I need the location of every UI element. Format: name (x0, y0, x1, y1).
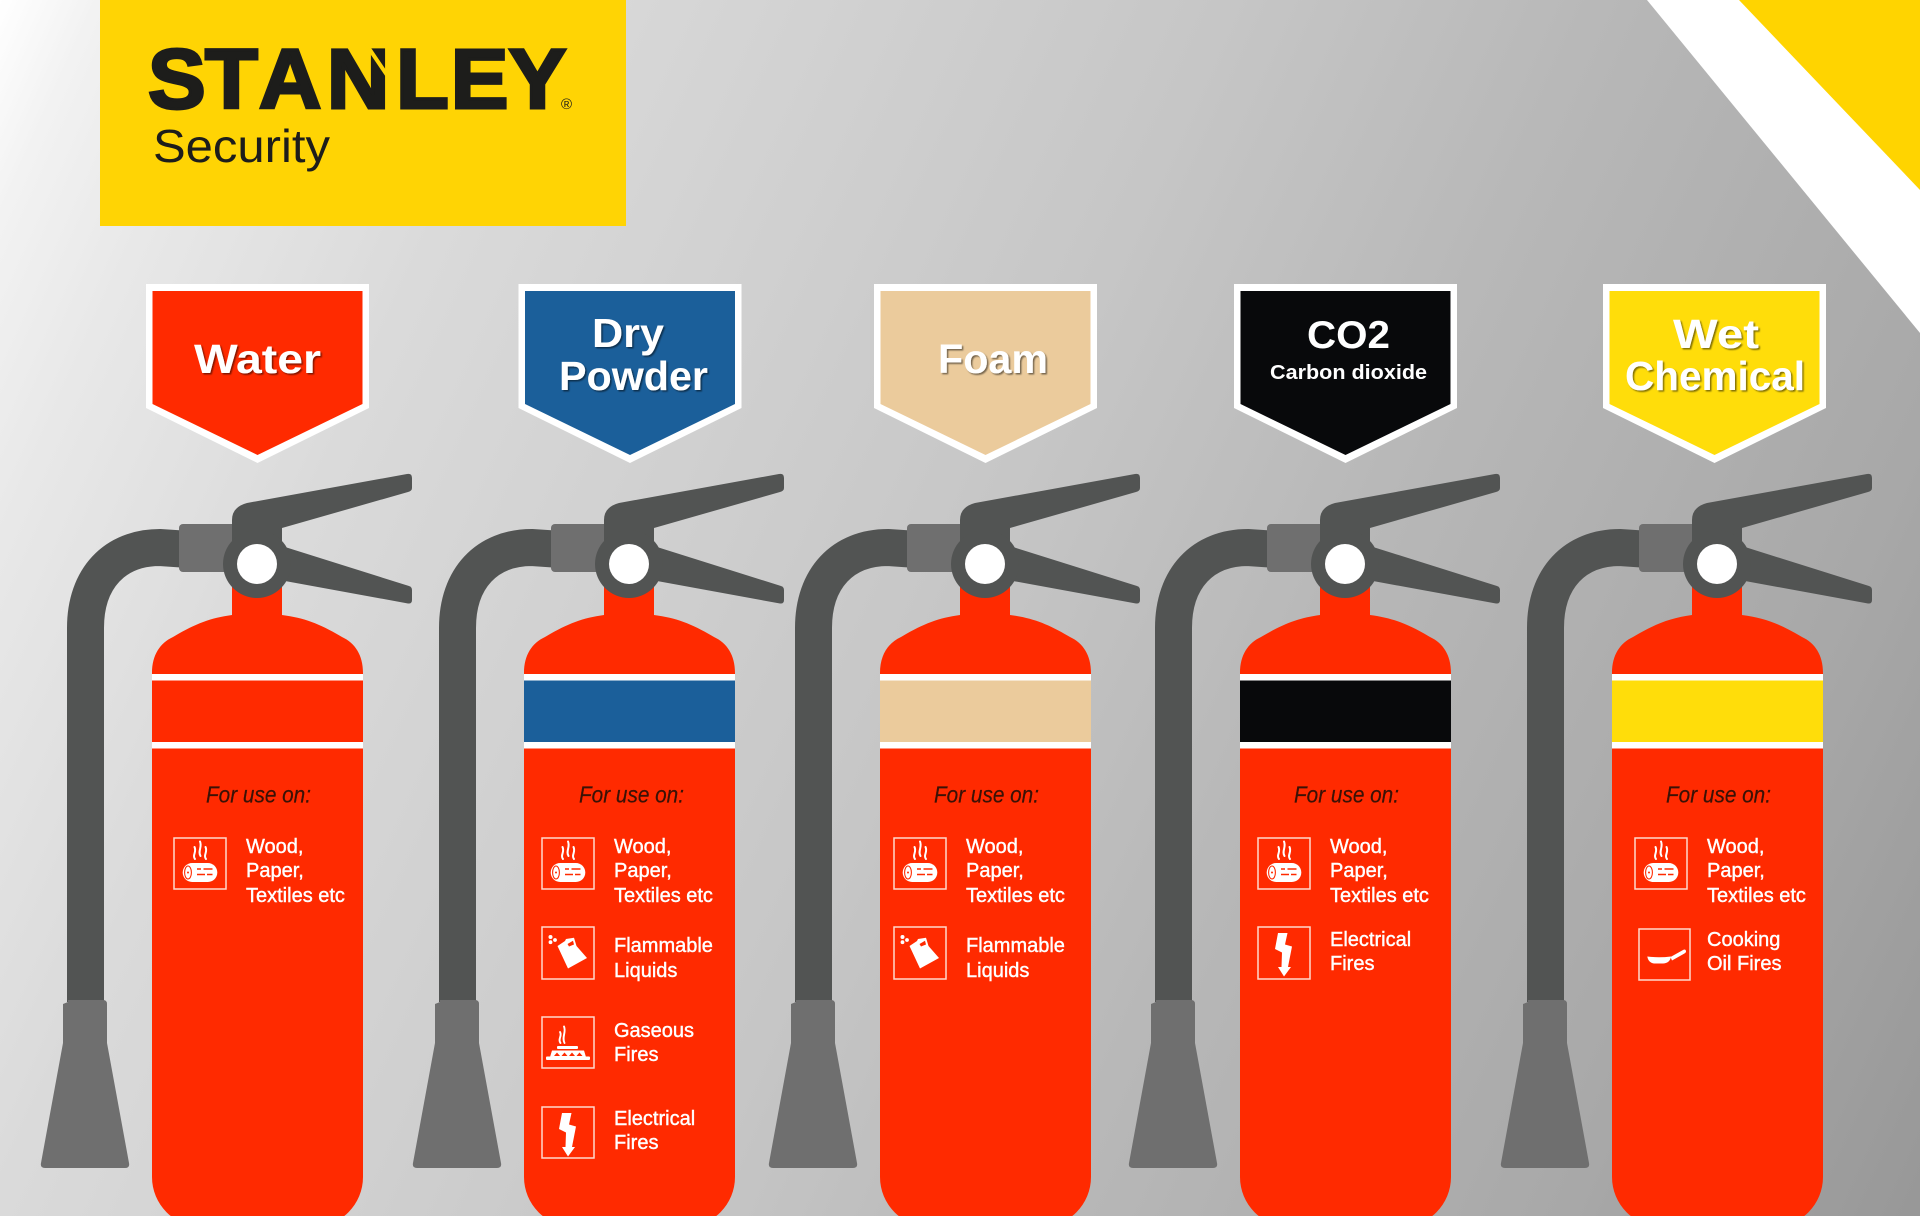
uses: dry powder (542, 782, 713, 1158)
uses: water (174, 782, 345, 907)
extinguisher: water (41, 474, 412, 1216)
icon: flammable liquids (894, 927, 946, 979)
for use on: For use on: (1666, 782, 1771, 808)
for use on: For use on: (934, 782, 1039, 808)
logo registered mark: ® (561, 96, 572, 113)
icon: wood (1258, 838, 1310, 889)
icon: wood (174, 838, 226, 889)
label: flammable liquids: Flammable (614, 935, 713, 957)
shield: water (146, 284, 369, 463)
shield title: CO2 (1307, 314, 1390, 357)
shield: foam (874, 284, 1097, 463)
label: electrical fires: Electrical (614, 1108, 695, 1130)
extinguisher: dry powder (413, 474, 784, 1216)
icon: wood (542, 838, 594, 889)
label: electrical fires: Electrical (1330, 929, 1411, 951)
uses: CO2 (1258, 782, 1429, 979)
shield title: Foam (938, 336, 1048, 382)
shield title: Wet (1673, 311, 1759, 357)
icon: wood (1635, 838, 1687, 889)
for use on: For use on: (579, 782, 684, 808)
corner white band (1647, 0, 1920, 333)
icon: electrical fires (542, 1107, 594, 1158)
extinguisher: CO2 (1129, 474, 1500, 1216)
label: wood: Paper, (1330, 860, 1388, 882)
shield: dry powder (518, 284, 742, 463)
label: gaseous fires: Gaseous (614, 1020, 694, 1042)
label: wood: Paper, (614, 860, 672, 882)
shield title: Water (194, 336, 321, 382)
label: wood: Wood, (246, 836, 303, 858)
shield: wet chemical (1603, 284, 1826, 463)
shield title line two: Chemical (1625, 353, 1805, 399)
label: cooking oil fires: Cooking (1707, 929, 1780, 951)
label: wood: Paper, (246, 860, 304, 882)
label: flammable liquids: Liquids (614, 960, 677, 982)
label: wood: Textiles etc (1330, 885, 1429, 907)
label: wood: Textiles etc (1707, 885, 1806, 907)
label: wood: Wood, (966, 836, 1023, 858)
uses: foam (894, 782, 1065, 982)
label: wood: Textiles etc (966, 885, 1065, 907)
label: wood: Textiles etc (614, 885, 713, 907)
label: wood: Paper, (966, 860, 1024, 882)
logo wordmark: STANLEY (148, 33, 566, 127)
logo subtitle: Security (153, 120, 330, 172)
shield title line two: Powder (559, 353, 708, 399)
label: wood: Wood, (614, 836, 671, 858)
icon: gaseous fires (542, 1017, 594, 1068)
icon: wood (894, 838, 946, 889)
uses: wet chemical (1635, 782, 1806, 980)
extinguisher: wet chemical (1501, 474, 1872, 1216)
extinguisher: foam (769, 474, 1140, 1216)
for use on: For use on: (206, 782, 311, 808)
icon: electrical fires (1258, 927, 1310, 979)
shield subtitle: Carbon dioxide (1270, 362, 1427, 384)
label: flammable liquids: Flammable (966, 935, 1065, 957)
for use on: For use on: (1294, 782, 1399, 808)
shield title: Dry (592, 310, 664, 356)
corner yellow triangle (1739, 0, 1920, 190)
icon: flammable liquids (542, 927, 594, 979)
label: electrical fires: Fires (614, 1132, 658, 1154)
shield: CO2 (1234, 284, 1457, 463)
label: wood: Paper, (1707, 860, 1765, 882)
label: flammable liquids: Liquids (966, 960, 1029, 982)
label: wood: Textiles etc (246, 885, 345, 907)
label: cooking oil fires: Oil Fires (1707, 953, 1781, 975)
label: gaseous fires: Fires (614, 1044, 658, 1066)
label: wood: Wood, (1707, 836, 1764, 858)
logo panel: Stanley Security (100, 0, 626, 226)
label: wood: Wood, (1330, 836, 1387, 858)
label: electrical fires: Fires (1330, 953, 1374, 975)
icon: cooking oil fires (1639, 929, 1690, 980)
